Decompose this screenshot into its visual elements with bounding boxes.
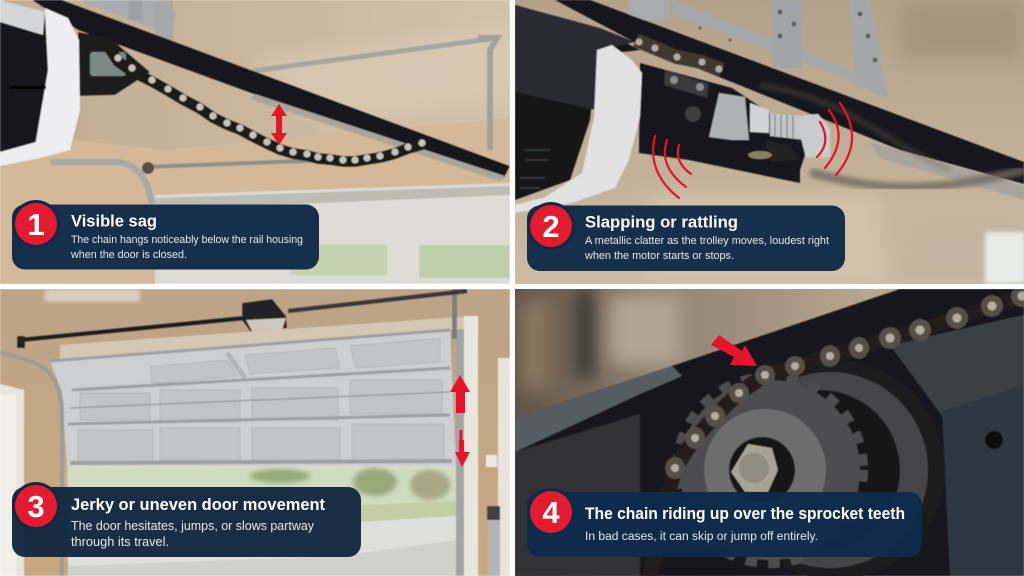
caption: 2 Slapping or rattling: Slapping or rattling bbox=[585, 214, 738, 232]
tracks bbox=[0, 352, 62, 576]
garage door header and windows bbox=[155, 183, 510, 284]
side door bbox=[0, 384, 24, 576]
caption: 2 Slapping or rattling: when the motor starts or stops. bbox=[584, 250, 734, 262]
driveway and trees outside bbox=[68, 465, 460, 576]
back plate bbox=[806, 575, 864, 576]
panel: slapping or rattling bbox=[515, 0, 1024, 285]
trolley bbox=[639, 63, 810, 183]
caption: 4 The chain riding up over the sprocket teeth: In bad cases, it can skip or jump off entirely. bbox=[585, 531, 818, 543]
ceiling bracket bbox=[79, 0, 176, 30]
icon: red up and down movement arrows bbox=[450, 375, 470, 467]
photo: trolley vibrating below rail bbox=[515, 0, 1024, 285]
chain over sprocket bbox=[650, 285, 1024, 576]
opener housing bbox=[0, 8, 48, 154]
icon: red double arrow showing sag bbox=[271, 104, 287, 145]
caption: 2 Slapping or rattling bbox=[527, 202, 845, 271]
frame bbox=[515, 289, 1024, 576]
caption: 4 The chain riding up over the sprocket teeth: The chain riding up over the sprocket teeth bbox=[585, 505, 905, 523]
icon: red vibration arcs bbox=[653, 103, 852, 198]
ceiling brackets bbox=[672, 0, 860, 88]
right track and trim bbox=[464, 316, 478, 576]
icon: red arrow pointing to chain bbox=[711, 335, 757, 366]
panel: visible sag bbox=[0, 0, 510, 284]
caption: 3 Jerky or uneven door movement: through its travel. bbox=[71, 535, 169, 549]
photo: partly open garage door bbox=[0, 289, 510, 576]
caption: 1 Visible sag: Visible sag bbox=[71, 212, 157, 230]
caption: 4 The chain riding up over the sprocket teeth bbox=[527, 488, 922, 557]
photo: sagging chain under opener rail bbox=[0, 0, 510, 284]
caption: 3 Jerky or uneven door movement: 3 bbox=[27, 489, 45, 524]
panel: jerky door movement bbox=[0, 289, 510, 576]
chain links bbox=[636, 40, 722, 70]
panel: chain riding over sprocket bbox=[515, 285, 1024, 576]
caption: 1 Visible sag: 1 bbox=[27, 207, 45, 242]
door struts bbox=[50, 330, 452, 463]
caption: 3 Jerky or uneven door movement: Jerky or uneven door movement bbox=[71, 495, 325, 514]
rail bbox=[32, 0, 510, 178]
trolley bbox=[78, 32, 150, 96]
photo: chain over sprocket close-up bbox=[515, 289, 1024, 576]
torsion rail and opener bbox=[20, 318, 245, 340]
caption: 2 Slapping or rattling: A metallic clatter as the trolley moves, loudest right bbox=[585, 235, 829, 247]
caption: 1 Visible sag: when the door is closed. bbox=[70, 249, 187, 261]
opener housing bbox=[515, 43, 640, 200]
caption: 2 Slapping or rattling: 2 bbox=[542, 209, 560, 244]
caption: 3 Jerky or uneven door movement: The door hesitates, jumps, or slows partway bbox=[71, 519, 315, 533]
sagging chain bbox=[105, 42, 422, 162]
door panels bbox=[50, 330, 456, 466]
spring and silver blocks bbox=[709, 93, 749, 140]
caption: 1 Visible sag bbox=[12, 200, 319, 270]
blurred chain bbox=[810, 170, 1024, 187]
caption: 1 Visible sag: The chain hangs noticeably below the rail housing bbox=[71, 234, 303, 246]
sprocket bbox=[680, 380, 860, 560]
caption: 4 The chain riding up over the sprocket teeth: 4 bbox=[542, 495, 560, 530]
caption: 3 Jerky or uneven door movement bbox=[12, 482, 361, 557]
rail bbox=[555, 0, 1024, 184]
